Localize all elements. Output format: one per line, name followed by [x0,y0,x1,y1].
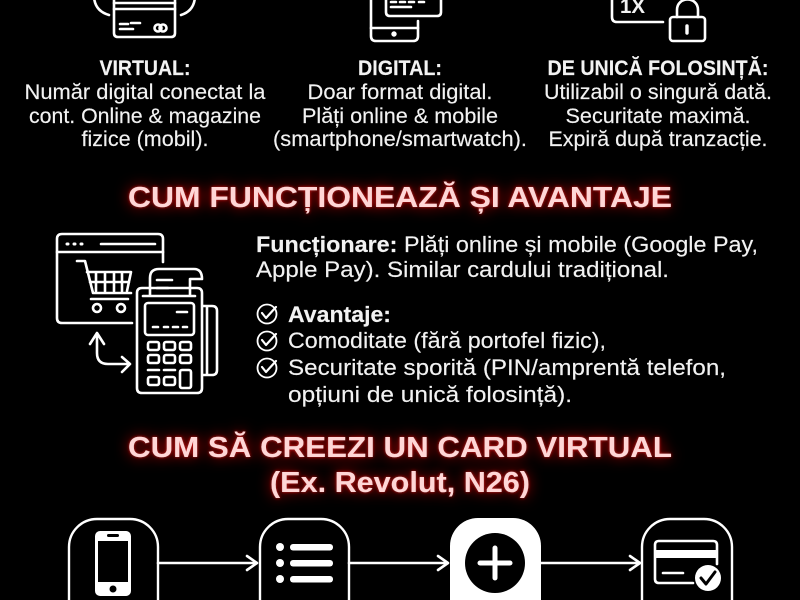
icon: virtual card [94,0,195,37]
text: virtual card: cont. Online & magazine [29,104,261,128]
text: how it works: Funcționare: Plăți online și mobile (Google Pay, [256,232,758,257]
step 1: phone [69,519,158,600]
step 4: card confirmed [642,519,732,600]
text: virtual card: Număr digital conectat la [24,80,266,104]
text: how it works: Apple Pay). Similar cardului tradițional. [256,257,669,282]
text: advantages: Securitate sporită (PIN/amprentă telefon, [288,355,726,380]
icon: single-use lock [612,0,705,41]
text: virtual card: fizice (mobil). [82,127,208,151]
heading: create a virtual card: (Ex. Revolut, N26) [270,467,530,499]
text: virtual card: VIRTUAL: [100,56,190,80]
text: advantages: Comoditate (fără portofel fizic), [288,328,606,353]
text: advantages: opțiuni de unică folosință). [288,382,572,407]
heading: create a virtual card: CUM SĂ CREEZI UN CARD VIRTUAL [128,431,672,464]
arrow [541,556,640,570]
heading: create a virtual card [128,431,672,499]
text: digital card [273,56,527,151]
text: digital card: Plăți online & mobile [302,104,498,128]
text: digital card: DIGITAL: [358,56,442,80]
icon: digital phone [371,0,441,41]
step 2: menu list [260,519,349,600]
icon: check marks [258,304,276,378]
text: how it works [256,232,758,282]
text: virtual card [24,56,266,151]
arrow [349,556,448,570]
icon: online shop and POS terminal [57,234,217,393]
text: digital card: Doar format digital. [308,80,492,104]
step 3: add button [450,518,541,600]
text: digital card: (smartphone/smartwatch). [273,127,527,151]
text: single-use card: Utilizabil o singură dată. [544,80,772,104]
text: single-use card: Expiră după tranzacție. [548,127,768,151]
heading: how it works: CUM FUNCȚIONEAZĂ ȘI AVANTAJE [128,181,672,214]
text: advantages [288,302,726,407]
text: advantages: Avantaje: [288,302,391,327]
text: single-use card: DE UNICĂ FOLOSINȚĂ: [548,55,768,80]
arrow [158,556,257,570]
text: single-use card [544,55,772,151]
text: single-use card: Securitate maximă. [566,104,750,128]
